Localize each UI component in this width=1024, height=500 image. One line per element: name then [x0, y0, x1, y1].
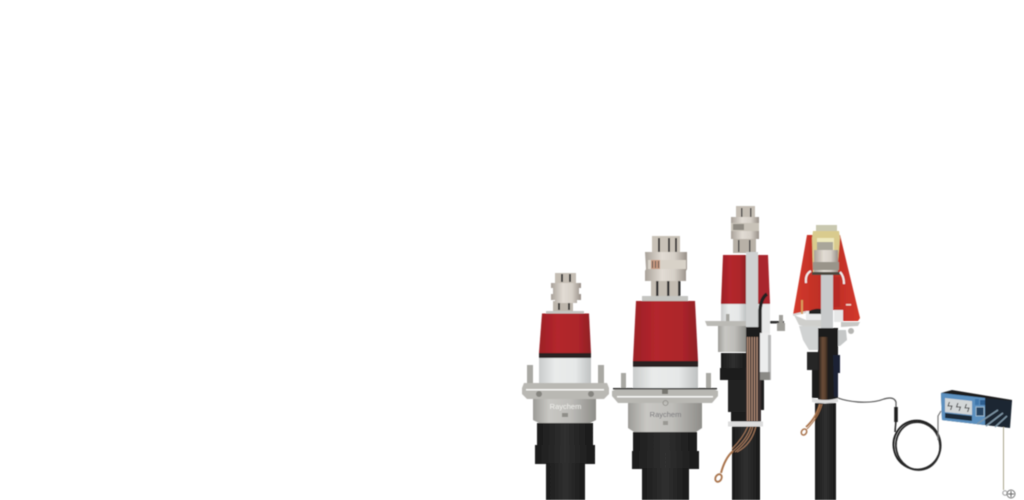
flange and inner white: [806, 311, 821, 328]
red skirt: [793, 235, 860, 321]
bolt on right flange: [770, 315, 785, 331]
termination 1: Raychem: [550, 402, 581, 411]
termination 2: [612, 236, 718, 500]
termination 1: [522, 273, 609, 500]
termination 3: [705, 206, 785, 500]
skirt details: [801, 300, 803, 314]
cable tie: [728, 422, 763, 426]
earth lug: [800, 404, 822, 436]
earth wire and terminal: [1003, 427, 1015, 498]
lightning indicators: ϟ: [946, 400, 954, 413]
earth lug: [714, 451, 733, 483]
termination 4: [793, 225, 860, 500]
sensor cable and coil: [838, 398, 945, 474]
monitor display unit: [941, 390, 1012, 428]
head: [816, 225, 837, 232]
lightning indicators: ϟ: [955, 401, 962, 414]
copper earth wires: [732, 337, 757, 452]
termination 2: Raychem: [650, 410, 681, 419]
cable tie: [812, 398, 838, 404]
lightning indicators: [946, 400, 971, 415]
lightning indicators: ϟ: [963, 402, 971, 415]
white clips on skirt: [806, 271, 811, 283]
